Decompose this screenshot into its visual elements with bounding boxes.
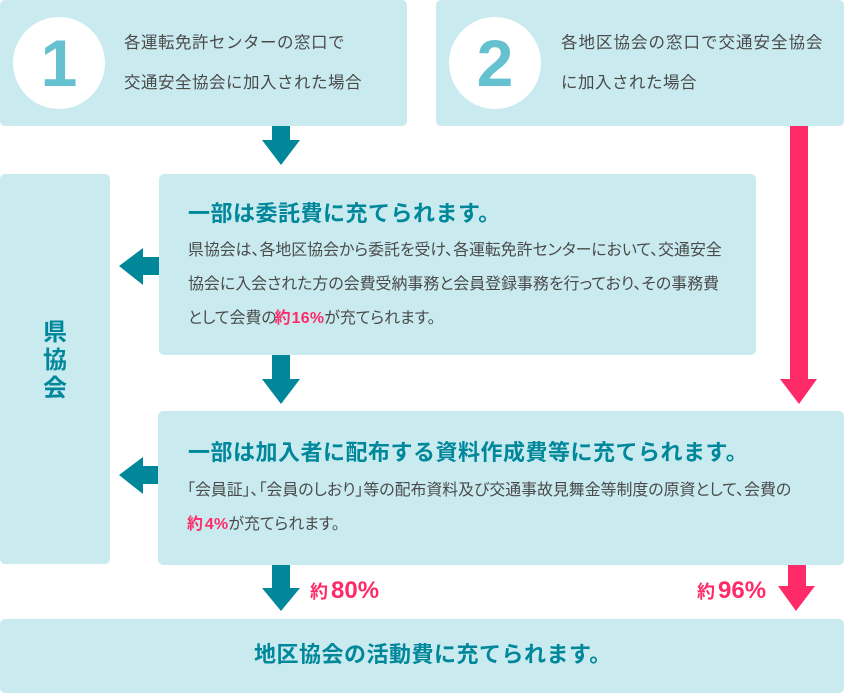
text: case 2 description: 各地区協会の窓口で交通安全協会 — [561, 34, 824, 52]
label: prefectural association: 協 — [43, 347, 67, 374]
text: materials cost description — [187, 481, 791, 533]
text: case 1 description: 交通安全協会に加入された場合 — [124, 74, 362, 92]
panel: case 2 — [436, 0, 844, 126]
heading: district activity cost: 地区協会の活動費に充てられます。 — [254, 642, 612, 667]
panel: district activity cost — [0, 619, 844, 693]
icon: number 2 — [449, 17, 541, 109]
label: about 80 percent: 約80% — [310, 577, 379, 604]
text: materials cost description: 「会員証」、「会員のしおり」等の配布資料及び交通事故見舞金等制度の原資として、会費の — [187, 482, 791, 499]
text: commission fee description — [188, 241, 722, 327]
text: case 2 description — [561, 34, 824, 92]
icon: number 1 — [13, 17, 105, 109]
icon: number 2: 2 — [477, 26, 513, 100]
heading: materials cost: 一部は加入者に配布する資料作成費等に充てられます。 — [188, 440, 748, 465]
panel: commission fee — [159, 174, 756, 355]
heading: commission fee: 一部は委託費に充てられます。 — [188, 201, 501, 226]
text: commission fee description: 県協会は、各地区協会から委託を受け、各運転免許センターにおいて、交通安全 — [188, 242, 722, 259]
text: case 1 description: 各運転免許センターの窓口で — [124, 34, 345, 52]
panel: prefectural association — [0, 174, 110, 564]
label: prefectural association — [43, 319, 67, 402]
label: prefectural association: 県 — [43, 319, 67, 346]
text: case 2 description: に加入された場合 — [561, 74, 697, 92]
icon: number 1: 1 — [41, 26, 77, 100]
label: prefectural association: 会 — [43, 375, 67, 402]
text: materials cost description: 約4%が充てられます。 — [187, 516, 340, 533]
text: commission fee description: 協会に入会された方の会費受納事務と会員登録事務を行っており、その事務費 — [188, 276, 719, 293]
text: commission fee description: として会費の約16%が充てられます。 — [188, 310, 435, 327]
text: case 1 description — [124, 34, 362, 92]
panel: materials cost — [158, 411, 844, 565]
panel: case 1 — [0, 0, 407, 126]
label: about 96 percent: 約96% — [697, 577, 766, 604]
